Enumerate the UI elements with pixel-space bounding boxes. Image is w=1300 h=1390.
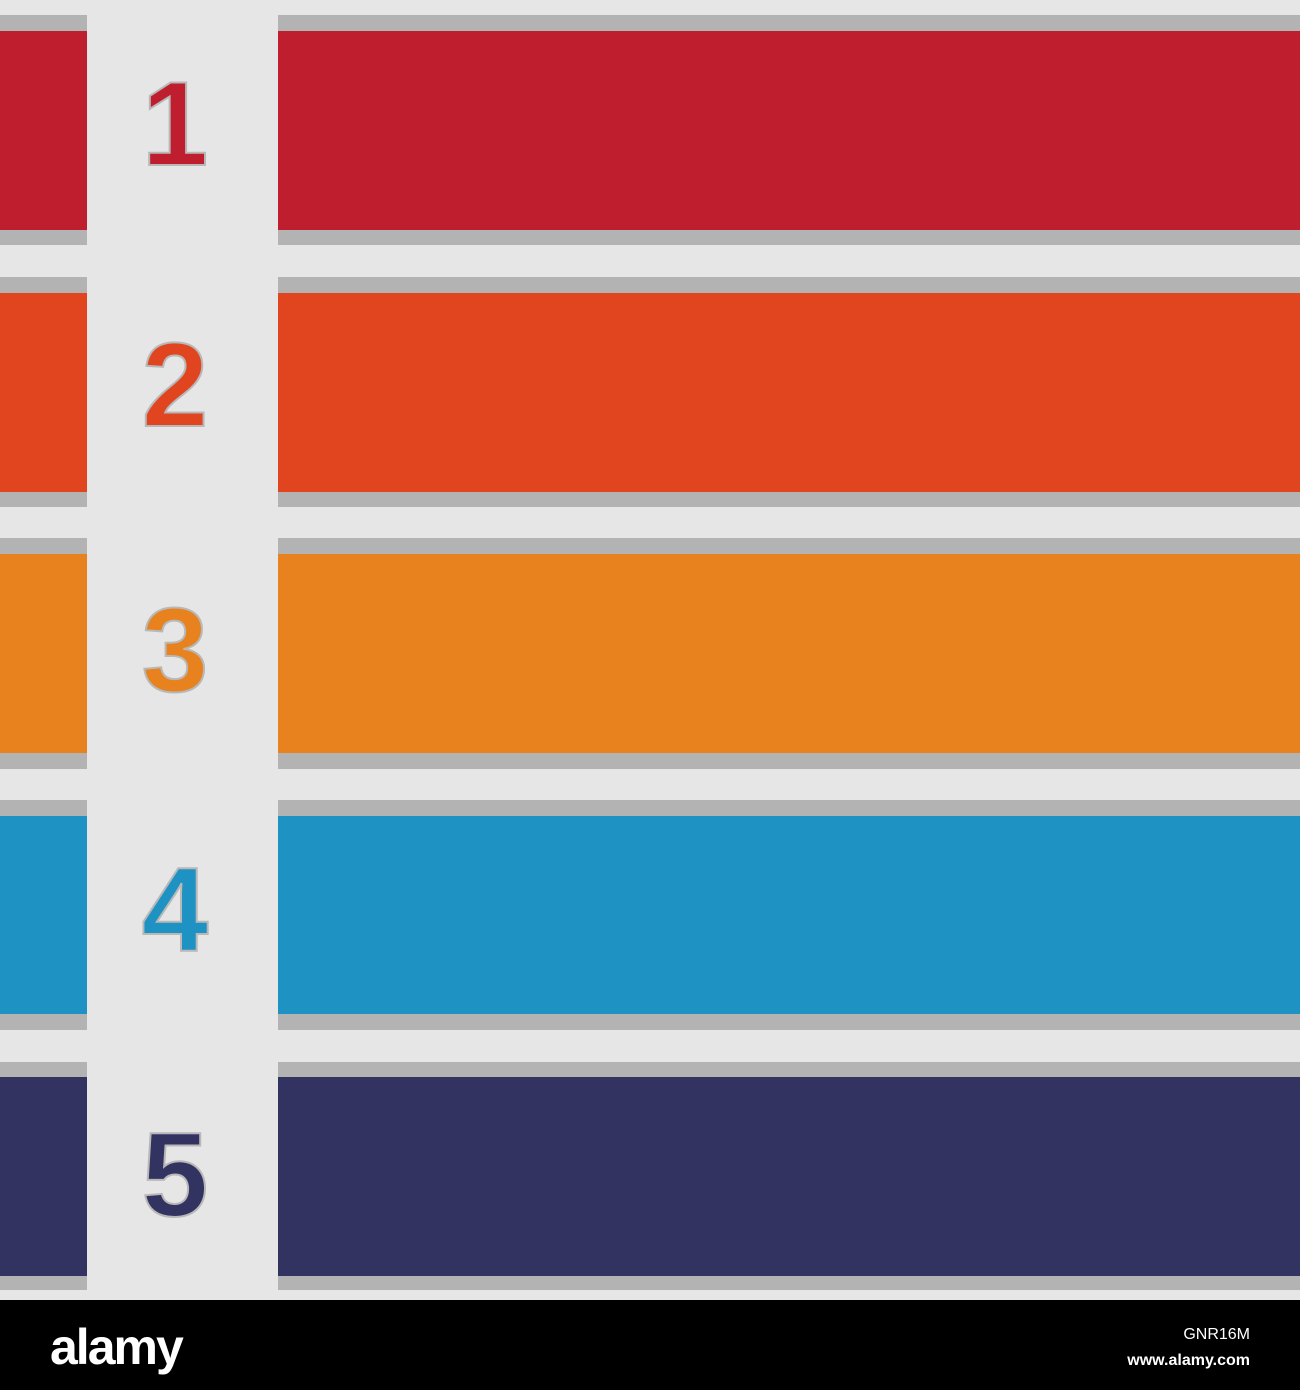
- footer bar: [0, 1300, 1300, 1390]
- number 5: 5: [142, 1108, 208, 1242]
- footer id: www.alamy.com: [1127, 1352, 1250, 1369]
- number 1: 1: [142, 57, 208, 191]
- row 3 bar: [0, 538, 1300, 769]
- footer logo: alamy: [50, 1319, 182, 1375]
- row 2 bar: [0, 277, 1300, 507]
- footer id: GNR16M: [1183, 1326, 1250, 1343]
- footer id: [1127, 1326, 1250, 1369]
- row 1 bar: [0, 15, 1300, 245]
- number 3: 3: [142, 583, 208, 717]
- number 4: 4: [142, 843, 208, 977]
- number column: [87, 0, 278, 1300]
- row 4 bar: [0, 800, 1300, 1030]
- row 5 bar: [0, 1062, 1300, 1290]
- number 2: 2: [142, 318, 208, 452]
